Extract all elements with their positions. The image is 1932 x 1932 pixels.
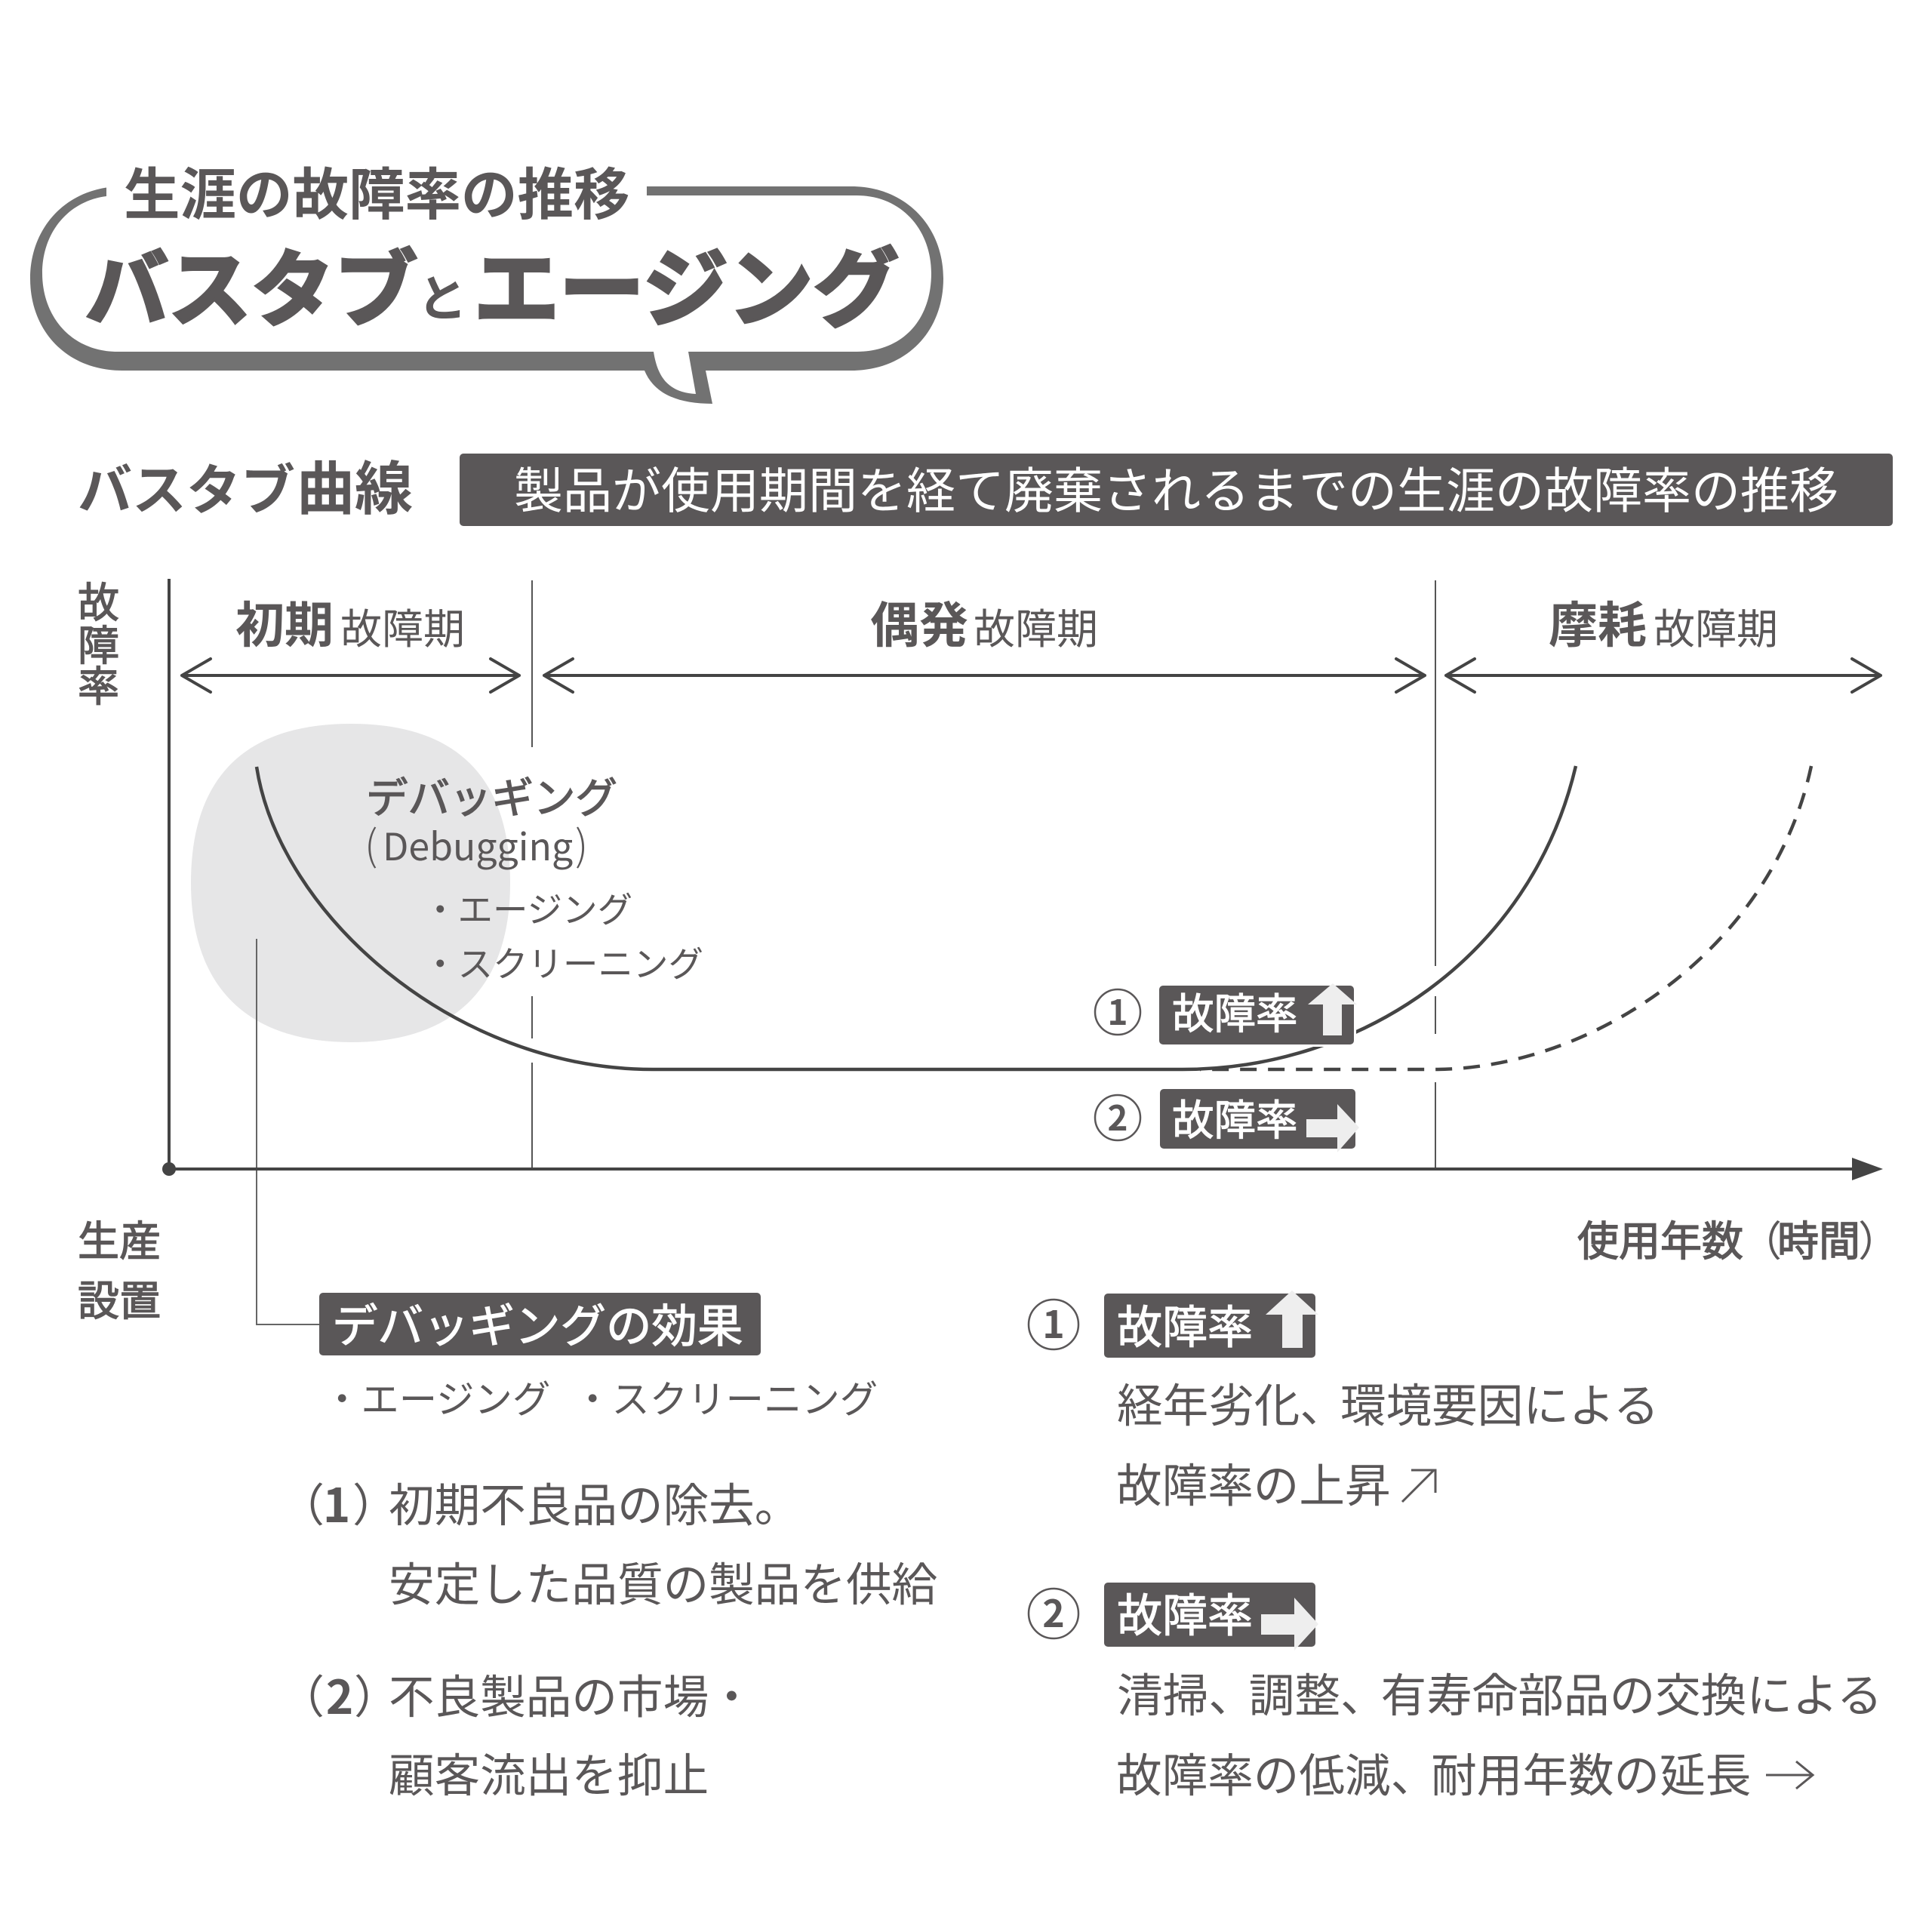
- effect 2: 2: [326, 1660, 353, 1727]
- chart tag 2: failure rate flat: 2: [1107, 1091, 1128, 1141]
- effect 1: （: [279, 1469, 325, 1535]
- title: subtitle: 生涯の故障率の推移: [124, 150, 630, 231]
- debugging effects heading: デバッギングの効果: [332, 1290, 743, 1355]
- x axis start labels: 設置: [78, 1267, 161, 1327]
- chart tag 1: failure rate up: 故障率: [1172, 980, 1298, 1041]
- highlight blob: debugging period: [191, 724, 510, 1042]
- item 1 tag: failure rate up: 1: [1042, 1295, 1065, 1349]
- chart tag 2: failure rate flat: 故障率: [1172, 1087, 1298, 1147]
- title: main heading: [85, 220, 899, 344]
- chart tag 2: failure rate flat: [1095, 1087, 1359, 1152]
- y axis label: 障: [78, 612, 119, 672]
- title: main heading: バスタブ: [85, 223, 417, 343]
- item 2 tag: failure rate flat: [1029, 1580, 1318, 1651]
- period span arrows: [182, 659, 1881, 692]
- debugging label: ・スクリーニング: [423, 937, 703, 987]
- debugging label: [365, 764, 703, 987]
- effect 2: 顧客流出を抑止: [389, 1740, 709, 1805]
- debugging methods: [323, 1369, 878, 1424]
- bathtub curve: solid: [257, 766, 1576, 1069]
- item 2 tag: failure rate flat: 2: [1042, 1584, 1065, 1638]
- heading: bathtub curve: バスタブ: [78, 446, 295, 525]
- chart tag 1: failure rate up: 1: [1107, 986, 1128, 1035]
- item 1 tag: failure rate up: 故障率: [1117, 1291, 1253, 1357]
- item 1 text: [1116, 1370, 1659, 1515]
- item 2 tag: failure rate flat: 故障率: [1117, 1580, 1253, 1645]
- debugging label: (: [365, 812, 377, 872]
- x axis label: ）: [1858, 1208, 1900, 1268]
- banner: curve definition: 製品が使用期間を経て廃棄されるまでの生涯の故障率の推移: [514, 451, 1838, 522]
- x axis start labels: 生産: [78, 1208, 161, 1268]
- x axis start labels: [78, 1208, 161, 1327]
- period label: wear-out failure: 摩耗: [1549, 586, 1647, 657]
- heading: bathtub curve: 曲線: [297, 443, 413, 527]
- effect 1: [279, 1468, 937, 1614]
- debugging label: ・エージング: [423, 882, 632, 933]
- title: main heading: と: [417, 259, 467, 331]
- x axis label: 使用年数: [1577, 1208, 1743, 1268]
- x and y axes: [162, 579, 1883, 1180]
- x axis label: [1577, 1208, 1900, 1268]
- effect 1: 1: [323, 1468, 350, 1536]
- item 1 text: 経年劣化、環境要因による: [1117, 1370, 1659, 1435]
- item 2 text: 清掃、調整、有寿命部品の交換による: [1117, 1660, 1882, 1725]
- item 1 text: 故障率の上昇: [1116, 1450, 1391, 1515]
- connector: blob to debugging effects: [257, 939, 319, 1324]
- effect 1: 初期不良品の除去。: [389, 1469, 800, 1535]
- effect 1: 安定した品質の製品を供給: [389, 1549, 937, 1614]
- y axis label: [78, 569, 119, 713]
- x axis label: （: [1740, 1208, 1782, 1268]
- effect 1: ）: [352, 1469, 398, 1535]
- debugging methods: ・エージング: [323, 1369, 550, 1424]
- effect 2: ）: [354, 1661, 399, 1727]
- period dividers: [532, 580, 1435, 1169]
- effect 2: （: [279, 1661, 325, 1727]
- heading: bathtub curve: [78, 443, 413, 527]
- period label: wear-out failure: 故障期: [1654, 595, 1778, 656]
- chart tag 1: failure rate up: [1095, 980, 1357, 1044]
- period label: random failure: [870, 586, 1098, 657]
- y axis label: 故: [78, 569, 119, 629]
- bathtub curve: extended dashed: [1200, 766, 1811, 1069]
- period label: initial failure: 故障期: [340, 595, 465, 656]
- debugging label: デバッギング: [366, 764, 617, 825]
- effect 2: [279, 1660, 755, 1805]
- period label: initial failure: 初期: [235, 586, 334, 657]
- title speech bubble: [30, 150, 943, 404]
- x axis label: 時間: [1777, 1208, 1860, 1268]
- item 1 tag: failure rate up: [1029, 1291, 1318, 1358]
- item 2 text: [1116, 1660, 1882, 1805]
- period label: random failure: 故障期: [974, 595, 1098, 656]
- debugging methods: ・スクリーニング: [574, 1369, 878, 1424]
- item 2 text: 故障率の低減、耐用年数の延長: [1116, 1740, 1751, 1805]
- effect 2: 不良製品の市場・: [389, 1661, 755, 1727]
- y axis label: 率: [78, 653, 119, 713]
- period label: random failure: 偶発: [870, 586, 968, 657]
- title: main heading: エージング: [474, 220, 899, 344]
- period label: initial failure: [235, 586, 465, 657]
- debugging label: Debugging: [383, 817, 573, 872]
- period label: wear-out failure: [1549, 586, 1778, 657]
- debugging label: ): [575, 812, 588, 872]
